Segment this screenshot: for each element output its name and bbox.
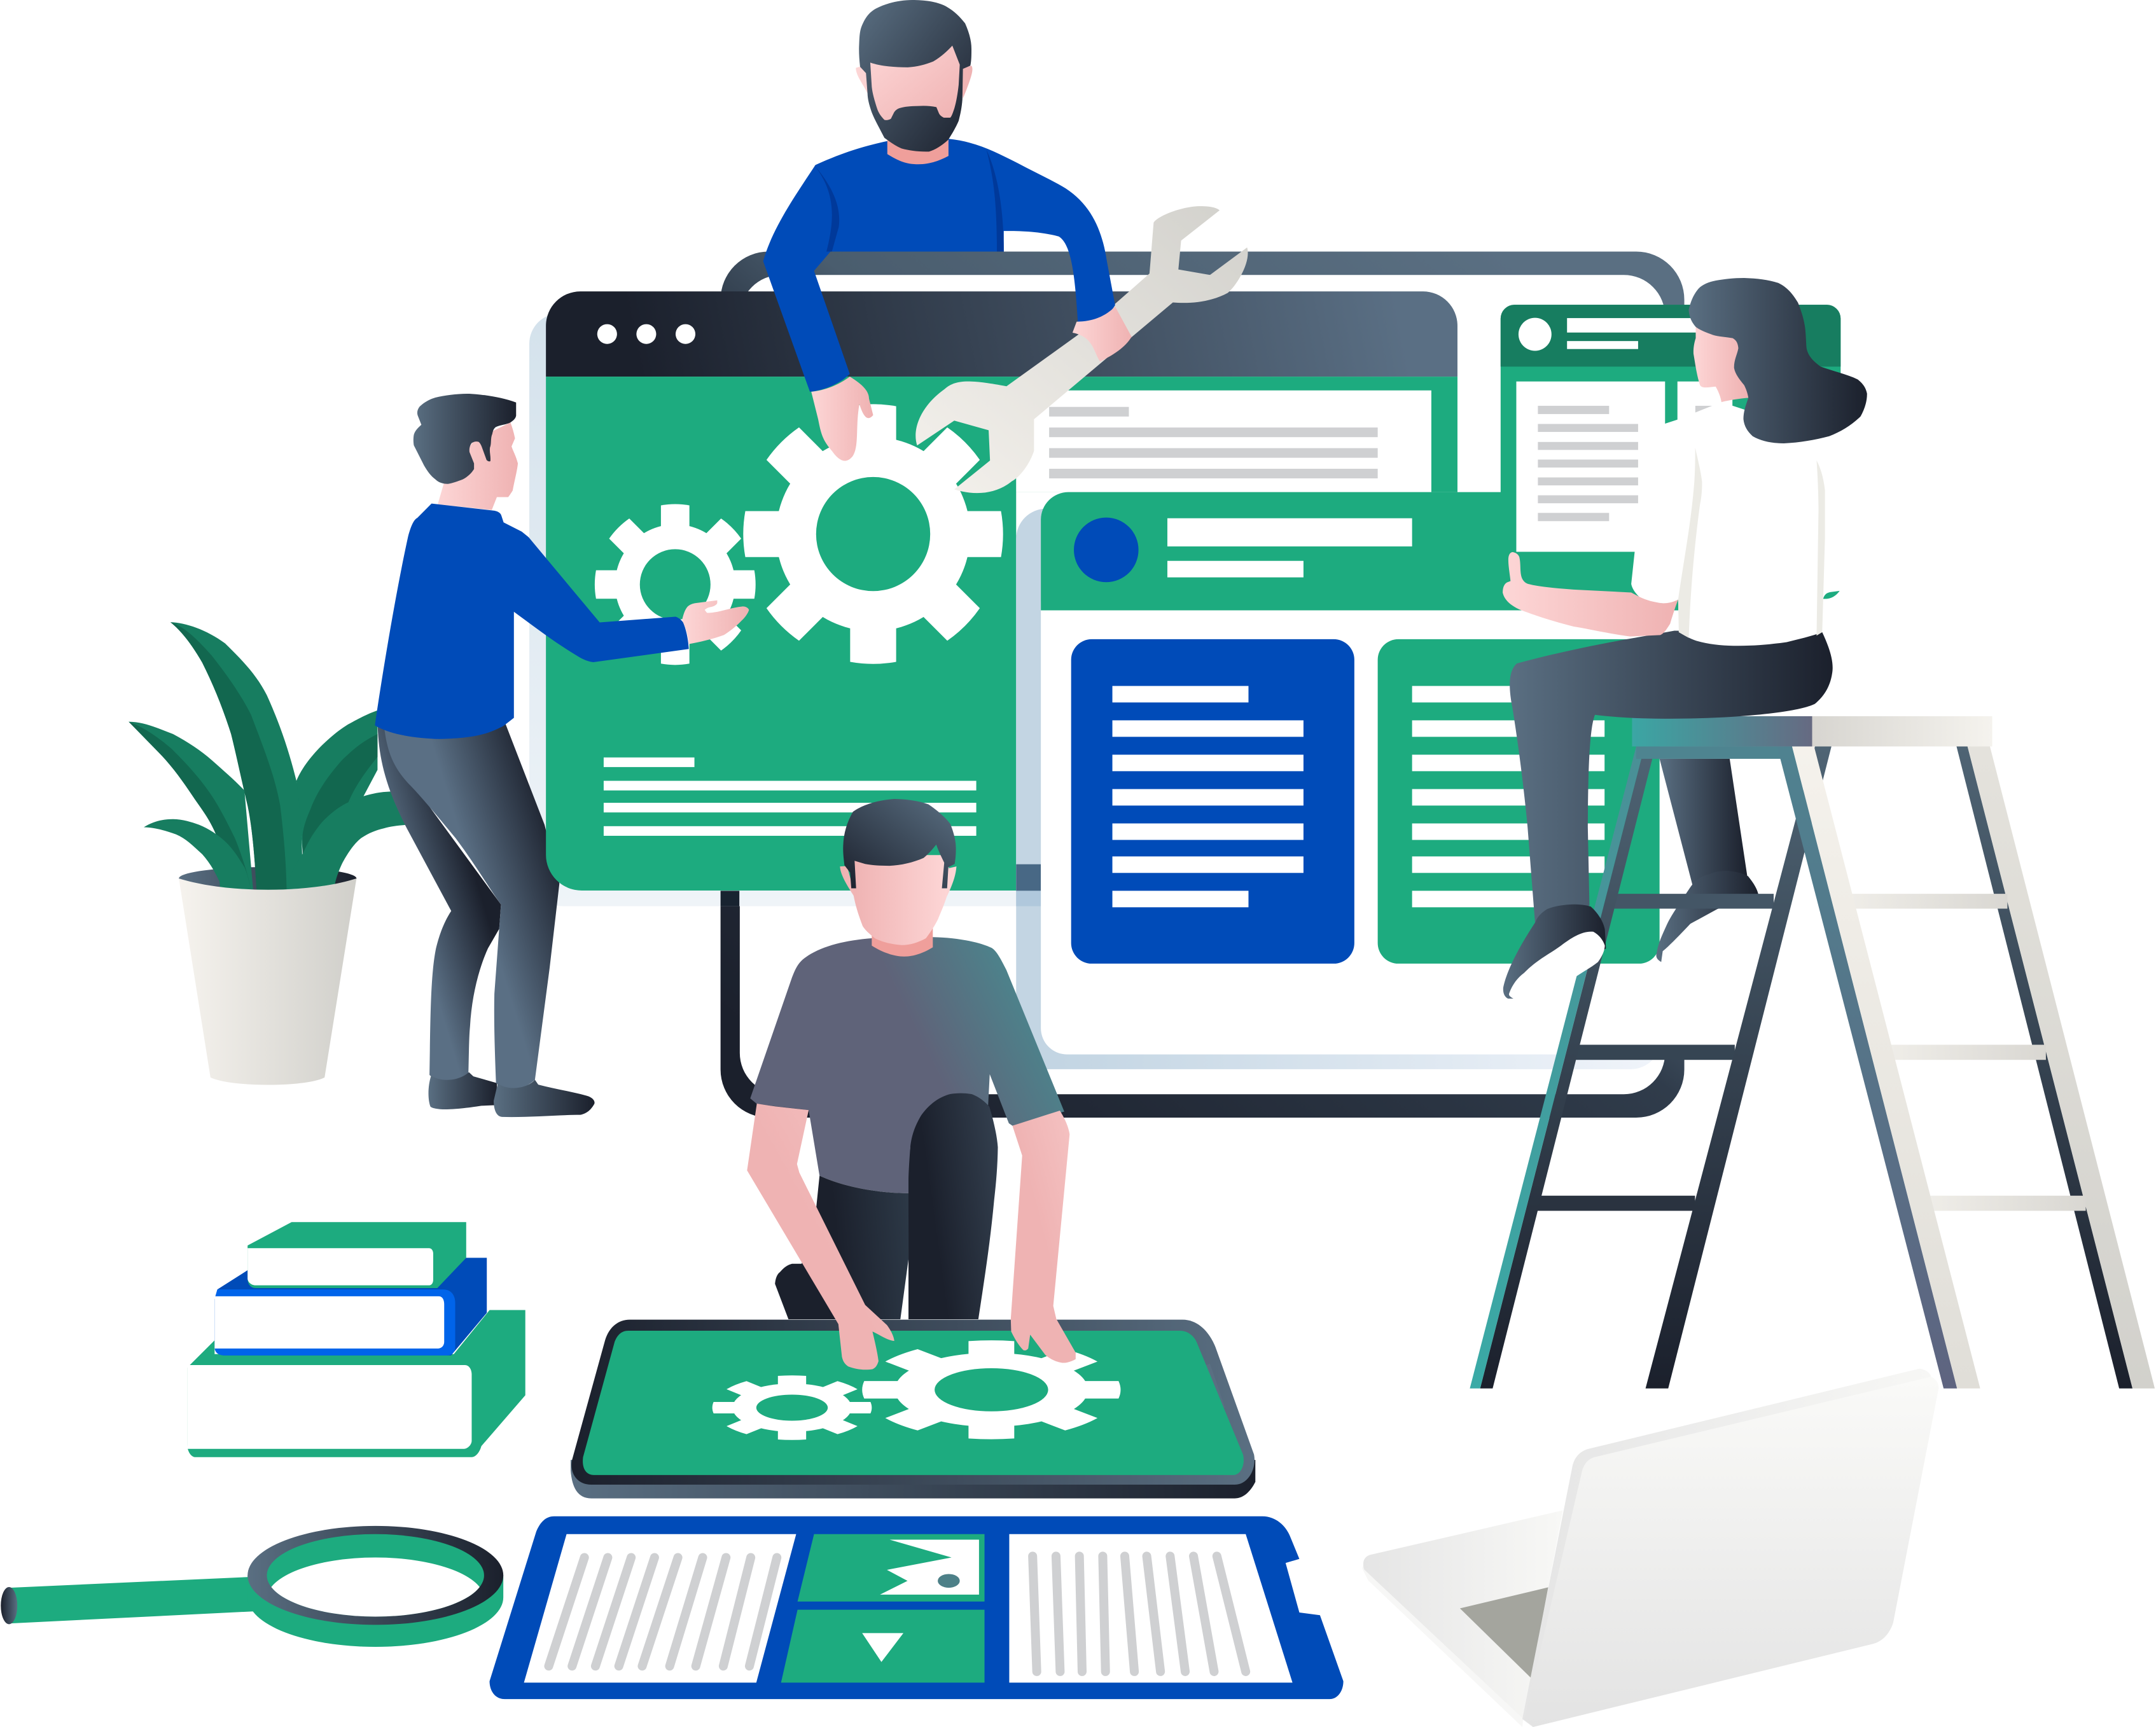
neck xyxy=(887,135,949,164)
thigh and foot xyxy=(775,1176,909,1319)
person: man at left, legs and shoes xyxy=(378,720,595,1117)
face xyxy=(870,46,960,120)
keyboard dark triangle xyxy=(1460,1587,1548,1678)
middle frame cream leg xyxy=(1792,746,1980,1389)
lens inner wall xyxy=(267,1534,484,1616)
middle blue book xyxy=(214,1258,487,1356)
magnifying glass xyxy=(1,1526,503,1647)
middle frame slate strip xyxy=(1777,746,1957,1389)
tablet small gear xyxy=(713,1375,872,1440)
tablet large gear xyxy=(862,1340,1120,1439)
header bars xyxy=(1167,518,1412,578)
ears xyxy=(856,65,972,99)
front frame left leg teal xyxy=(1470,746,1645,1389)
laptop xyxy=(1362,1369,1938,1727)
wrench xyxy=(915,206,1248,493)
white text lines xyxy=(604,758,977,836)
rear frame cream leg xyxy=(1968,746,2155,1389)
rear frame dark strip xyxy=(1956,746,2132,1389)
shirt xyxy=(750,937,1064,1193)
blue sweater xyxy=(375,504,689,739)
lens opening xyxy=(271,1557,480,1617)
small leaf xyxy=(144,819,251,889)
right page lines xyxy=(1033,1556,1246,1672)
green sliver xyxy=(1823,591,1840,599)
right page xyxy=(1009,1534,1293,1682)
top green book xyxy=(247,1222,466,1288)
stack of books xyxy=(187,1222,525,1457)
near shoe xyxy=(1503,905,1606,999)
triangle marker xyxy=(862,1633,903,1662)
tablet body xyxy=(490,1516,1344,1699)
raised knee xyxy=(908,1093,998,1319)
hair xyxy=(1688,278,1867,443)
person: man at left, upper body xyxy=(375,394,749,739)
left leaf xyxy=(129,722,253,889)
ears xyxy=(840,866,956,897)
lower right leaf xyxy=(287,791,407,889)
image dot xyxy=(938,1574,960,1588)
face xyxy=(850,855,949,945)
left page xyxy=(524,1534,796,1682)
front frame rungs xyxy=(1534,894,1774,1211)
handle end cap xyxy=(1,1587,17,1624)
tablet screen xyxy=(583,1331,1244,1475)
bottom green book xyxy=(187,1310,525,1457)
laptop lid xyxy=(1524,1377,1938,1727)
left arm and hand xyxy=(747,1104,894,1370)
back leg xyxy=(378,723,501,1081)
front leg xyxy=(384,720,559,1090)
hair and beard xyxy=(859,0,971,151)
near leg and thigh xyxy=(1510,631,1833,929)
far leg xyxy=(1660,759,1748,885)
panel: third window base with dark green header xyxy=(1501,305,1840,599)
front frame left leg inner xyxy=(1480,746,1655,1389)
rear frame rungs xyxy=(1852,894,2086,1211)
tablet dark frame xyxy=(571,1320,1255,1485)
right leaf xyxy=(296,711,377,851)
panel: front window shadow xyxy=(1016,509,1661,1069)
white blouse xyxy=(1631,402,1852,646)
back monitor frame xyxy=(721,251,1685,1118)
right arm and hand xyxy=(1011,1111,1076,1363)
forearm xyxy=(1503,552,1678,637)
laptop base underside xyxy=(1362,1562,1524,1727)
documents in third window xyxy=(1516,382,1732,551)
right hand on wrench xyxy=(1073,307,1132,361)
green list card xyxy=(1378,639,1660,964)
tablet xyxy=(571,1320,1255,1499)
face xyxy=(1694,327,1748,402)
left page lines xyxy=(548,1558,777,1666)
top rung xyxy=(1636,746,1791,759)
shirt and left arm xyxy=(763,139,1115,392)
person: man kneeling at tablet xyxy=(747,799,1076,1370)
pot xyxy=(179,878,356,1085)
front frame right leg xyxy=(1646,746,1832,1389)
blue list card xyxy=(1071,639,1354,964)
hand xyxy=(682,600,749,644)
image thumbnail xyxy=(880,1539,979,1595)
panel: left window shadow xyxy=(529,314,1016,906)
person: woman seated on ladder xyxy=(1503,278,1867,999)
shoe sole xyxy=(1509,932,1605,999)
lens ring xyxy=(247,1526,503,1625)
lens barrel xyxy=(247,1576,503,1647)
top step right xyxy=(1812,716,1993,746)
panel: left window xyxy=(546,291,1457,891)
shirt folds xyxy=(814,149,1004,251)
large gear xyxy=(743,404,1003,664)
centre leaf xyxy=(170,622,303,889)
pot rim xyxy=(179,867,356,890)
blouse folds xyxy=(1678,448,1825,638)
front shoe xyxy=(494,1080,595,1117)
laptop base xyxy=(1363,1510,1563,1719)
laptop lid rim xyxy=(1522,1369,1931,1727)
hair xyxy=(843,799,956,889)
tablet base layer xyxy=(571,1460,1255,1499)
window control dots xyxy=(597,324,695,344)
blue avatar xyxy=(1074,518,1139,582)
back shoe xyxy=(429,1072,497,1109)
person: man with wrench xyxy=(763,0,1132,461)
far shoe xyxy=(1656,871,1759,962)
plant xyxy=(129,622,407,1085)
tablet side button xyxy=(1198,1364,1225,1408)
small gear xyxy=(595,504,756,665)
lower panel xyxy=(781,1610,985,1682)
hair xyxy=(414,394,516,484)
top step left xyxy=(1632,716,1812,746)
handle xyxy=(9,1577,258,1623)
stepladder xyxy=(1470,716,2155,1389)
grey text lines xyxy=(1049,407,1378,478)
left hand on gear xyxy=(811,377,873,461)
blue document tablet xyxy=(490,1516,1344,1699)
upper image panel xyxy=(798,1534,985,1602)
neck xyxy=(872,928,933,957)
stepladder back parts and woman's far leg xyxy=(1656,759,1759,962)
neck and face xyxy=(438,422,518,510)
panel: front window xyxy=(1041,492,1788,1055)
white content card xyxy=(1016,391,1431,492)
